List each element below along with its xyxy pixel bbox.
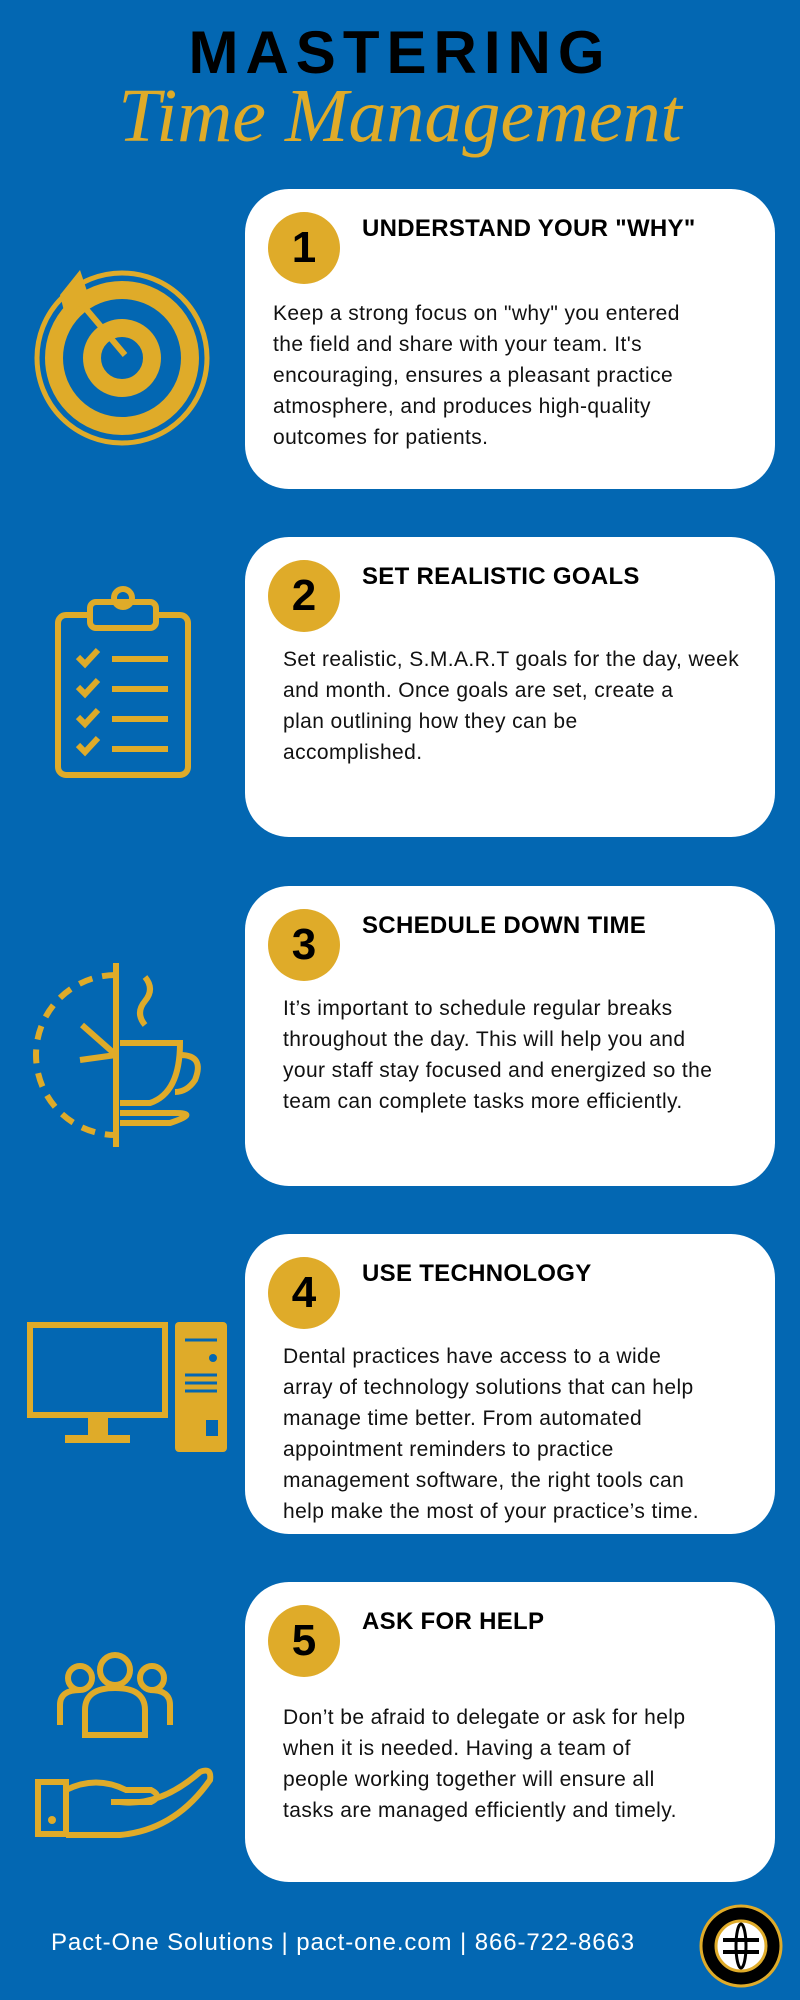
panel: step 1 [245,189,775,489]
footer text: Pact-One Solutions | pact-one.com | 866-722-8663 [51,1929,635,1956]
badge 4 [268,1257,340,1329]
title: script: Time Management [118,74,682,158]
text 1: the field and share with your team. It's [273,333,642,356]
icon: helping hand [35,1652,214,1838]
text 2: accomplished. [283,741,422,764]
badge 3: 3 [292,920,316,969]
text 5: tasks are managed efficiently and timely. [283,1799,677,1822]
text 3: team can complete tasks more efficiently. [283,1090,683,1113]
text 4: help make the most of your practice’s time. [283,1500,699,1523]
text 4 [283,1345,699,1523]
text 1: encouraging, ensures a pleasant practice [273,364,673,387]
text 4: appointment reminders to practice [283,1438,614,1461]
badge 2: 2 [292,571,316,620]
panel: step 2 [245,537,775,837]
badge 5 [268,1605,340,1677]
badge 1 [268,212,340,284]
text 2: and month. Once goals are set, create a [283,679,673,702]
text 5: when it is needed. Having a team of [283,1737,631,1760]
badge 2 [268,560,340,632]
icon: logo [700,1904,782,1988]
text 2: plan outlining how they can be [283,710,578,733]
text 4: array of technology solutions that can help [283,1376,694,1399]
heading 2: SET REALISTIC GOALS [362,563,640,590]
text 3: It’s important to schedule regular breaks [283,997,673,1020]
badge 5: 5 [292,1616,316,1665]
text 5: Don’t be afraid to delegate or ask for help [283,1706,685,1729]
text 3: your staff stay focused and energized so the [283,1059,712,1082]
text 4: management software, the right tools can [283,1469,684,1492]
icon: clipboard [55,586,191,778]
text 4: Dental practices have access to a wide [283,1345,661,1368]
panel: step 4 [245,1234,775,1534]
text 1 [273,302,680,449]
text 2: Set realistic, S.M.A.R.T goals for the day, week [283,648,739,671]
panel: step 3 [245,886,775,1186]
title: mastering: MASTERING [188,19,612,86]
icon: computer [27,1322,227,1452]
heading 3: SCHEDULE DOWN TIME [362,912,646,939]
heading 5: ASK FOR HELP [362,1608,544,1635]
badge 3 [268,909,340,981]
text 1: outcomes for patients. [273,426,488,449]
text 3 [283,997,712,1113]
badge 1: 1 [292,223,316,272]
text 2 [283,648,739,764]
text 3: throughout the day. This will help you and [283,1028,685,1051]
icon: clock and cup [33,963,201,1147]
heading 1: UNDERSTAND YOUR "WHY" [362,215,696,242]
badge 4: 4 [292,1268,316,1317]
title [118,19,684,158]
heading 4: USE TECHNOLOGY [362,1260,592,1287]
icon: target [34,270,210,446]
text 5 [283,1706,685,1822]
text 4: manage time better. From automated [283,1407,642,1430]
text 1: atmosphere, and produces high-quality [273,395,651,418]
text 5: people working together will ensure all [283,1768,655,1791]
panel: step 5 [245,1582,775,1882]
text 1: Keep a strong focus on "why" you entered [273,302,680,325]
